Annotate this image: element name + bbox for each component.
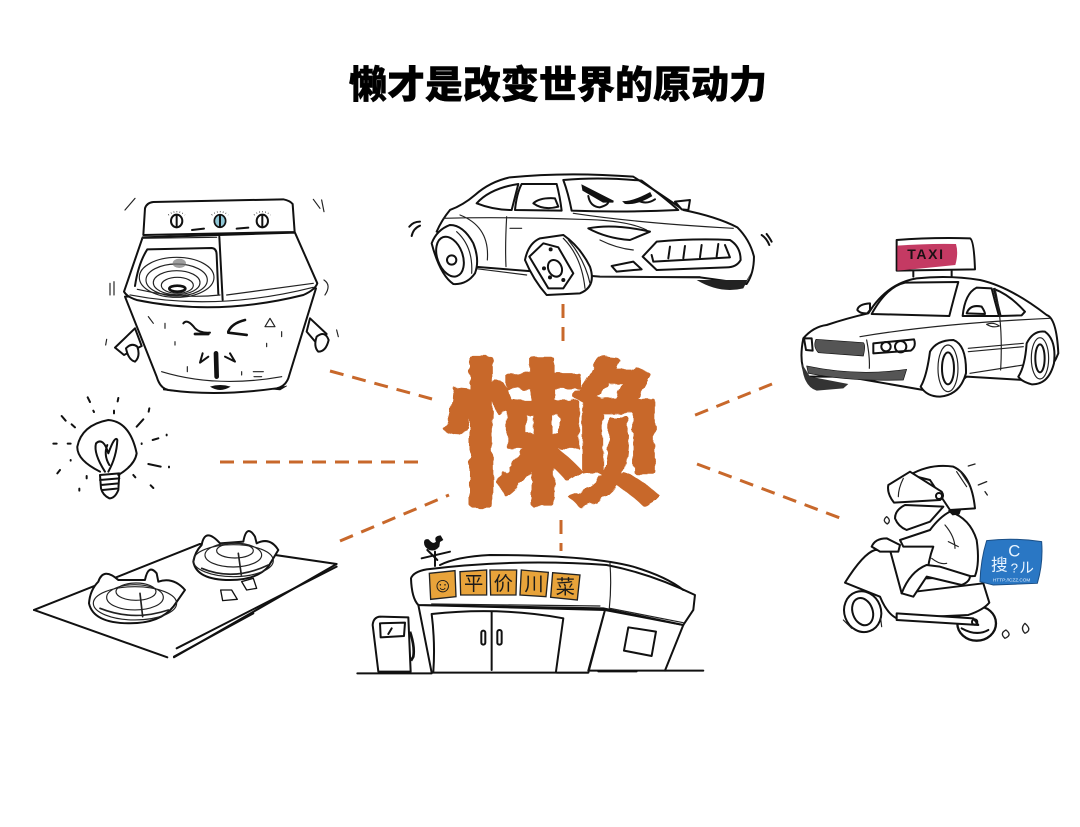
rear burner	[193, 531, 278, 580]
side window	[624, 627, 656, 656]
connector: restaurant	[560, 520, 562, 551]
washer face	[148, 317, 282, 390]
connector: gas stove	[340, 495, 449, 541]
illustration: Sichuan restaurant building	[357, 535, 703, 673]
washer body	[124, 233, 317, 393]
rider face	[895, 505, 943, 530]
car body	[437, 174, 754, 284]
connector: washing machine	[330, 371, 432, 399]
signboard lettering: ☺	[432, 574, 453, 597]
car motion marks	[409, 222, 772, 245]
delivery box lettering: C	[1008, 542, 1020, 561]
delivery box lettering: HTTP://CZZ.COM	[993, 577, 1030, 582]
front wheel	[525, 235, 592, 295]
connector: taxi	[693, 384, 772, 416]
taxi body lines	[860, 288, 1050, 373]
stove knobs	[221, 578, 257, 601]
delivery box lettering: ?	[1011, 561, 1018, 576]
illustration: light bulb and gas stove	[34, 397, 337, 657]
headlight	[588, 226, 650, 240]
exhaust puffs and sweat marks	[884, 464, 1029, 638]
taxi body	[801, 277, 1058, 391]
gas pump	[373, 617, 414, 672]
helmet	[888, 466, 975, 515]
washer tub and lid	[135, 237, 313, 300]
grille teeth	[612, 239, 741, 272]
icon: gas stove	[34, 531, 337, 657]
taxi roof sign	[897, 238, 975, 277]
front burner	[89, 570, 185, 623]
delivery box	[980, 539, 1042, 585]
washer arms	[115, 318, 329, 362]
icon: light bulb	[53, 397, 169, 498]
rider body	[900, 512, 978, 597]
connector: delivery rider	[697, 464, 840, 518]
car body lines	[443, 213, 733, 277]
double doors	[432, 611, 563, 672]
washer control panel	[143, 199, 295, 235]
taxi front grille and lights	[802, 338, 915, 391]
scooter swing arm	[897, 613, 978, 625]
signboard lettering: 价	[494, 574, 513, 595]
connector: sports car	[562, 304, 564, 346]
title: 懒才是改变世界的原动力	[349, 64, 767, 107]
car shadow under front	[697, 270, 753, 290]
signboard lettering	[432, 574, 575, 598]
restaurant building	[411, 555, 695, 673]
central brush character: 懒	[441, 350, 665, 526]
illustration: angry sports car	[409, 174, 772, 295]
taxi rear wheel	[1018, 331, 1054, 384]
angry eyes on windshield	[583, 186, 655, 207]
washer shake marks	[106, 198, 338, 345]
connector: light bulb	[220, 460, 418, 464]
signboard lettering: 川	[524, 575, 544, 596]
delivery box lettering	[991, 542, 1034, 582]
rear wheel	[431, 225, 477, 284]
taxi roof sign: TAXI	[907, 246, 945, 262]
car windows	[477, 178, 690, 212]
delivery box lettering: ル	[1019, 561, 1034, 577]
taxi front wheel	[921, 340, 966, 397]
taxi windows	[857, 282, 1025, 316]
dashed connector lines	[220, 304, 840, 551]
rooftop weather vane	[422, 535, 450, 566]
signboard lettering: 平	[464, 574, 483, 595]
illustration: angry washing machine	[106, 198, 338, 393]
signboard tiles	[429, 570, 580, 600]
signboard lettering: 菜	[556, 576, 575, 598]
ground line	[357, 671, 703, 673]
front wheel	[838, 586, 887, 637]
illustration: taxi	[801, 238, 1058, 397]
light rays	[53, 397, 169, 491]
rider hand and handlebar	[872, 538, 900, 552]
scooter body	[845, 550, 989, 618]
illustration: delivery rider on scooter	[838, 464, 1042, 641]
delivery box lettering: 搜	[991, 556, 1008, 575]
rear wheel	[957, 606, 996, 641]
